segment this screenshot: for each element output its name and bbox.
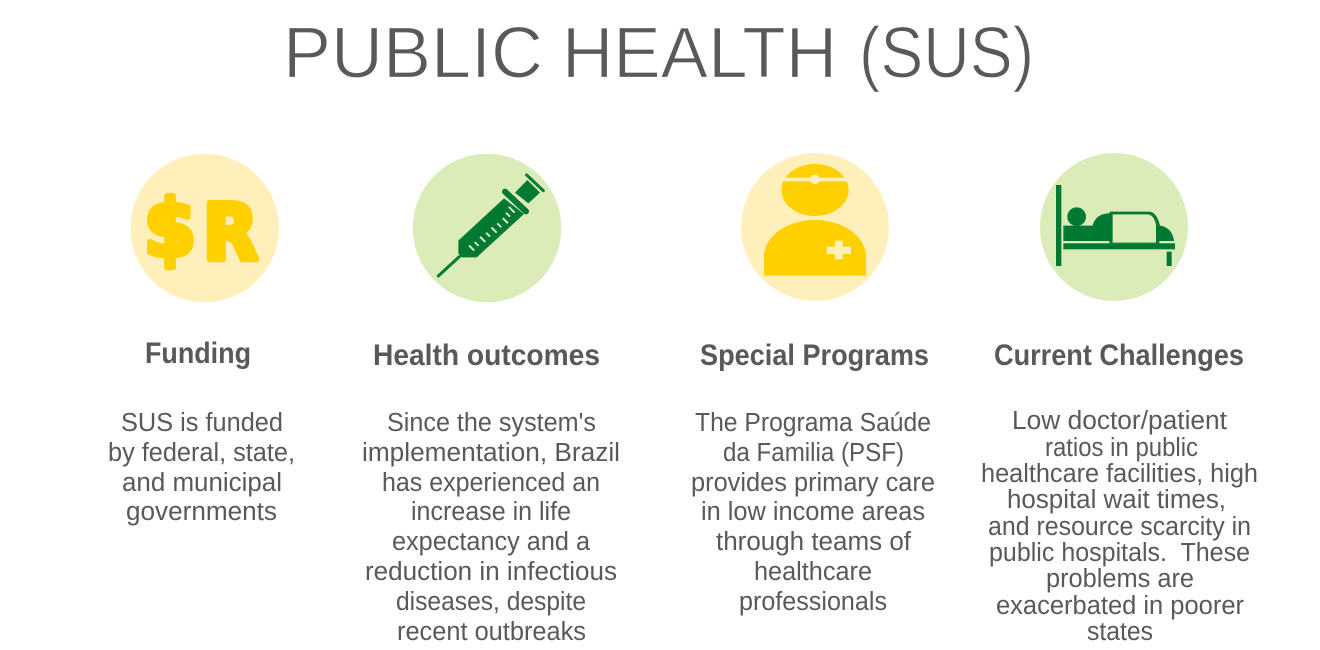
text: current challenges description: states: [1087, 618, 1153, 646]
text: current challenges description: [981, 407, 1258, 646]
panel: funding: [108, 154, 295, 526]
title: HEALTH: [562, 13, 837, 93]
text: funding description: governments: [126, 498, 277, 526]
text: current challenges description: healthcare facilities, high: [981, 460, 1258, 488]
icon: hospital bed: [1040, 153, 1188, 301]
icon: Brazilian real sign: $: [144, 184, 196, 274]
title: (SUS): [859, 13, 1034, 93]
text: current challenges description: Low doctor/patient: [1012, 407, 1227, 435]
text: current challenges description: exacerbated in poorer: [996, 592, 1245, 620]
text: funding description: SUS is funded: [121, 409, 283, 437]
text: current challenges description: and resource scarcity in: [988, 513, 1251, 541]
text: health outcomes description: expectancy and a: [392, 528, 591, 556]
text: health outcomes description: has experienced an: [382, 469, 600, 497]
text: health outcomes description: [362, 409, 620, 646]
text: health outcomes description: implementation, Brazil: [362, 439, 620, 467]
text: current challenges description: problems are: [1046, 565, 1194, 593]
heading: current challenges: Current Challenges: [994, 339, 1244, 372]
panel: special programs: [691, 153, 935, 616]
text: special programs description: The Programa Saúde: [695, 409, 931, 437]
text: health outcomes description: recent outbreaks: [397, 618, 586, 646]
text: funding description: [108, 409, 295, 526]
icon: Brazilian real sign: R: [203, 189, 258, 278]
text: current challenges description: ratios in public: [1045, 434, 1198, 462]
text: current challenges description: public hospitals. These: [989, 539, 1250, 567]
text: health outcomes description: diseases, despite: [396, 588, 586, 616]
text: health outcomes description: increase in life: [411, 498, 571, 526]
text: special programs description: through teams of: [716, 528, 912, 556]
text: special programs description: provides primary care: [691, 469, 935, 497]
text: funding description: by federal, state,: [108, 439, 295, 467]
icon: syringe: [413, 154, 561, 302]
panel: current challenges: [981, 153, 1258, 646]
panel: health outcomes: [362, 154, 620, 646]
text: health outcomes description: Since the system's: [387, 409, 596, 437]
heading: special programs: Special Programs: [700, 339, 929, 372]
icon: Brazilian real sign: [130, 154, 279, 302]
icon: doctor: [741, 153, 889, 301]
heading: health outcomes: Health outcomes: [373, 339, 600, 372]
text: special programs description: professionals: [739, 588, 887, 616]
text: special programs description: da Familia (PSF): [723, 439, 904, 467]
text: special programs description: [691, 409, 935, 616]
text: health outcomes description: reduction in infectious: [365, 558, 617, 586]
title: [283, 13, 1034, 93]
text: special programs description: healthcare: [754, 558, 872, 586]
heading: funding: Funding: [145, 337, 251, 370]
title: PUBLIC: [283, 13, 543, 93]
text: special programs description: in low income areas: [701, 498, 925, 526]
text: current challenges description: hospital wait times,: [1007, 486, 1226, 514]
text: funding description: and municipal: [122, 469, 282, 497]
